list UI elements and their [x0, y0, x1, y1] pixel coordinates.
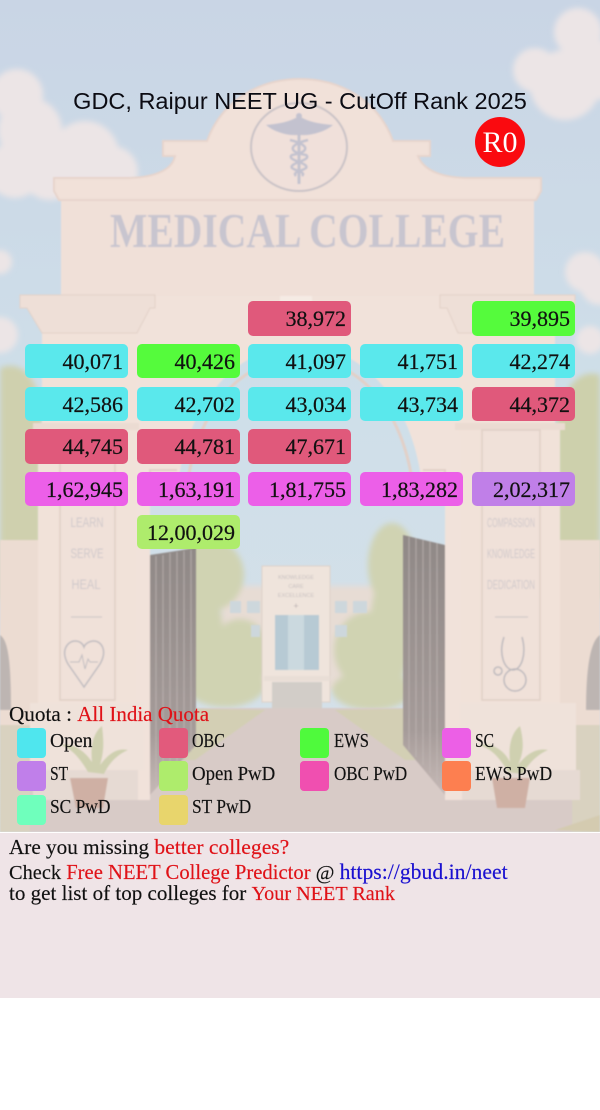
quota heading: Quota : All India Quota: [9, 702, 209, 726]
cell 47,671: [248, 429, 351, 464]
legend label: ST: ST: [50, 763, 68, 785]
legend swatch: Open: [17, 728, 46, 758]
cell 1,83,282: [360, 472, 463, 506]
upper pediment with caduceus: [61, 197, 534, 300]
cell 43,734: [360, 386, 463, 421]
background illustration: medical college gate: +: [293, 601, 299, 611]
legend label: SC: SC: [475, 730, 494, 752]
cell 1,81,755: 1,81,755: [269, 477, 346, 502]
cell 42,586: 42,586: [62, 392, 123, 416]
central tower of the building: [262, 566, 330, 702]
legend label: EWS PwD: EWS PwD: [475, 763, 552, 785]
cell 41,097: 41,097: [286, 349, 346, 374]
legend swatch: Open PwD: [159, 761, 188, 790]
legend swatch: ST: [17, 761, 46, 790]
wall sign text: MEDICAL COLLEGE: [110, 203, 505, 258]
legend swatch: ST PwD: [159, 795, 188, 824]
kerb stripes: [555, 815, 600, 832]
cell 1,63,191: 1,63,191: [158, 477, 235, 502]
central arch band and span: [137, 296, 462, 800]
left pillar: HEAL: [72, 576, 101, 592]
cell 42,702: [137, 386, 240, 421]
right pillar: [440, 295, 580, 800]
left pillar: [20, 295, 155, 800]
clouds: [0, 8, 600, 354]
cell 38,972: [248, 301, 351, 336]
potted plants: [60, 726, 548, 808]
cell 43,734: 43,734: [398, 392, 458, 416]
cell 1,83,282: 1,83,282: [381, 477, 458, 502]
legend label: SC PwD: SC PwD: [50, 796, 110, 818]
cell 42,274: [472, 344, 575, 378]
left pillar: SERVE: [70, 545, 104, 561]
cell 1,62,945: 1,62,945: [46, 477, 123, 502]
legend swatch: SC PwD: [17, 795, 46, 824]
right pillar: KNOWLEDGE: [487, 546, 535, 561]
legend label: ST PwD: ST PwD: [192, 796, 251, 818]
background illustration: medical college gate: CARE: [288, 584, 304, 590]
cell 2,02,317: 2,02,317: [493, 477, 570, 502]
cell 39,895: 39,895: [510, 306, 570, 331]
legend swatch: SC: [442, 728, 471, 758]
cell 1,81,755: [248, 472, 351, 506]
cell 12,00,029: 12,00,029: [147, 520, 235, 545]
cell 41,751: 41,751: [398, 349, 458, 374]
ground: [0, 708, 600, 832]
cell 44,781: 44,781: [174, 434, 235, 459]
cell 38,972: 38,972: [286, 306, 346, 331]
legend label: Open: Open: [50, 730, 92, 752]
right pillar: COMPASSION: [487, 515, 535, 530]
legend label: OBC PwD: OBC PwD: [334, 763, 407, 785]
right pillar: DEDICATION: [487, 577, 535, 592]
cell 12,00,029: [137, 515, 240, 549]
promo panel: [0, 833, 600, 998]
soft avenue foliage: [0, 366, 600, 710]
cell 42,702: 42,702: [174, 392, 235, 416]
cell 40,426: [137, 344, 240, 378]
legend swatch: OBC: [159, 728, 188, 758]
legend swatch: EWS: [300, 728, 329, 758]
cell 42,586: [25, 386, 128, 421]
cell 44,745: [25, 429, 128, 464]
building windows: [230, 601, 367, 637]
cell 47,671: 47,671: [286, 434, 346, 459]
round badge: R0: [475, 117, 525, 167]
background illustration: medical college gate: KNOWLEDGE: [278, 575, 314, 581]
cell 44,372: 44,372: [510, 392, 570, 416]
cell 43,034: 43,034: [286, 392, 346, 416]
rank grid: [25, 301, 575, 549]
cell 2,02,317: [472, 472, 575, 506]
cell 40,426: 40,426: [174, 349, 235, 374]
legend label: OBC: OBC: [192, 730, 225, 752]
cell 44,781: [137, 429, 240, 464]
round badge: R0: R0: [482, 126, 518, 159]
cell 40,071: 40,071: [62, 349, 123, 374]
cell 39,895: [472, 301, 575, 336]
cell 40,071: [25, 344, 128, 378]
cell 41,751: [360, 344, 463, 378]
legend label: Open PwD: Open PwD: [192, 763, 275, 785]
title: GDC, Raipur NEET UG - CutOff Rank 2025: [73, 88, 527, 114]
legend swatch: EWS PwD: [442, 761, 471, 790]
legend: [17, 728, 552, 825]
promo line: missing colleges: Are you missing better colleges?: [9, 835, 289, 859]
legend swatch: OBC PwD: [300, 761, 329, 790]
cell 1,63,191: [137, 472, 240, 506]
cell 41,097: [248, 344, 351, 378]
promo line: top colleges: to get list of top colleges for Your NEET Rank: [9, 881, 395, 905]
cell 44,372: [472, 386, 575, 421]
background illustration: medical college gate: EXCELLENCE: [278, 593, 315, 599]
side wings: [0, 540, 38, 730]
legend label: EWS: EWS: [334, 730, 369, 752]
cell 42,274: 42,274: [510, 349, 570, 374]
left pillar: LEARN: [70, 514, 104, 530]
iron gates: [150, 548, 196, 795]
cell 44,745: 44,745: [62, 434, 123, 459]
cell 43,034: [248, 386, 351, 421]
cell 1,62,945: [25, 472, 128, 506]
promo line: predictor link: Check Free NEET College Predictor @ https://gbud.in/neet: [9, 860, 508, 884]
background illustration: medical college gate: [0, 0, 600, 832]
